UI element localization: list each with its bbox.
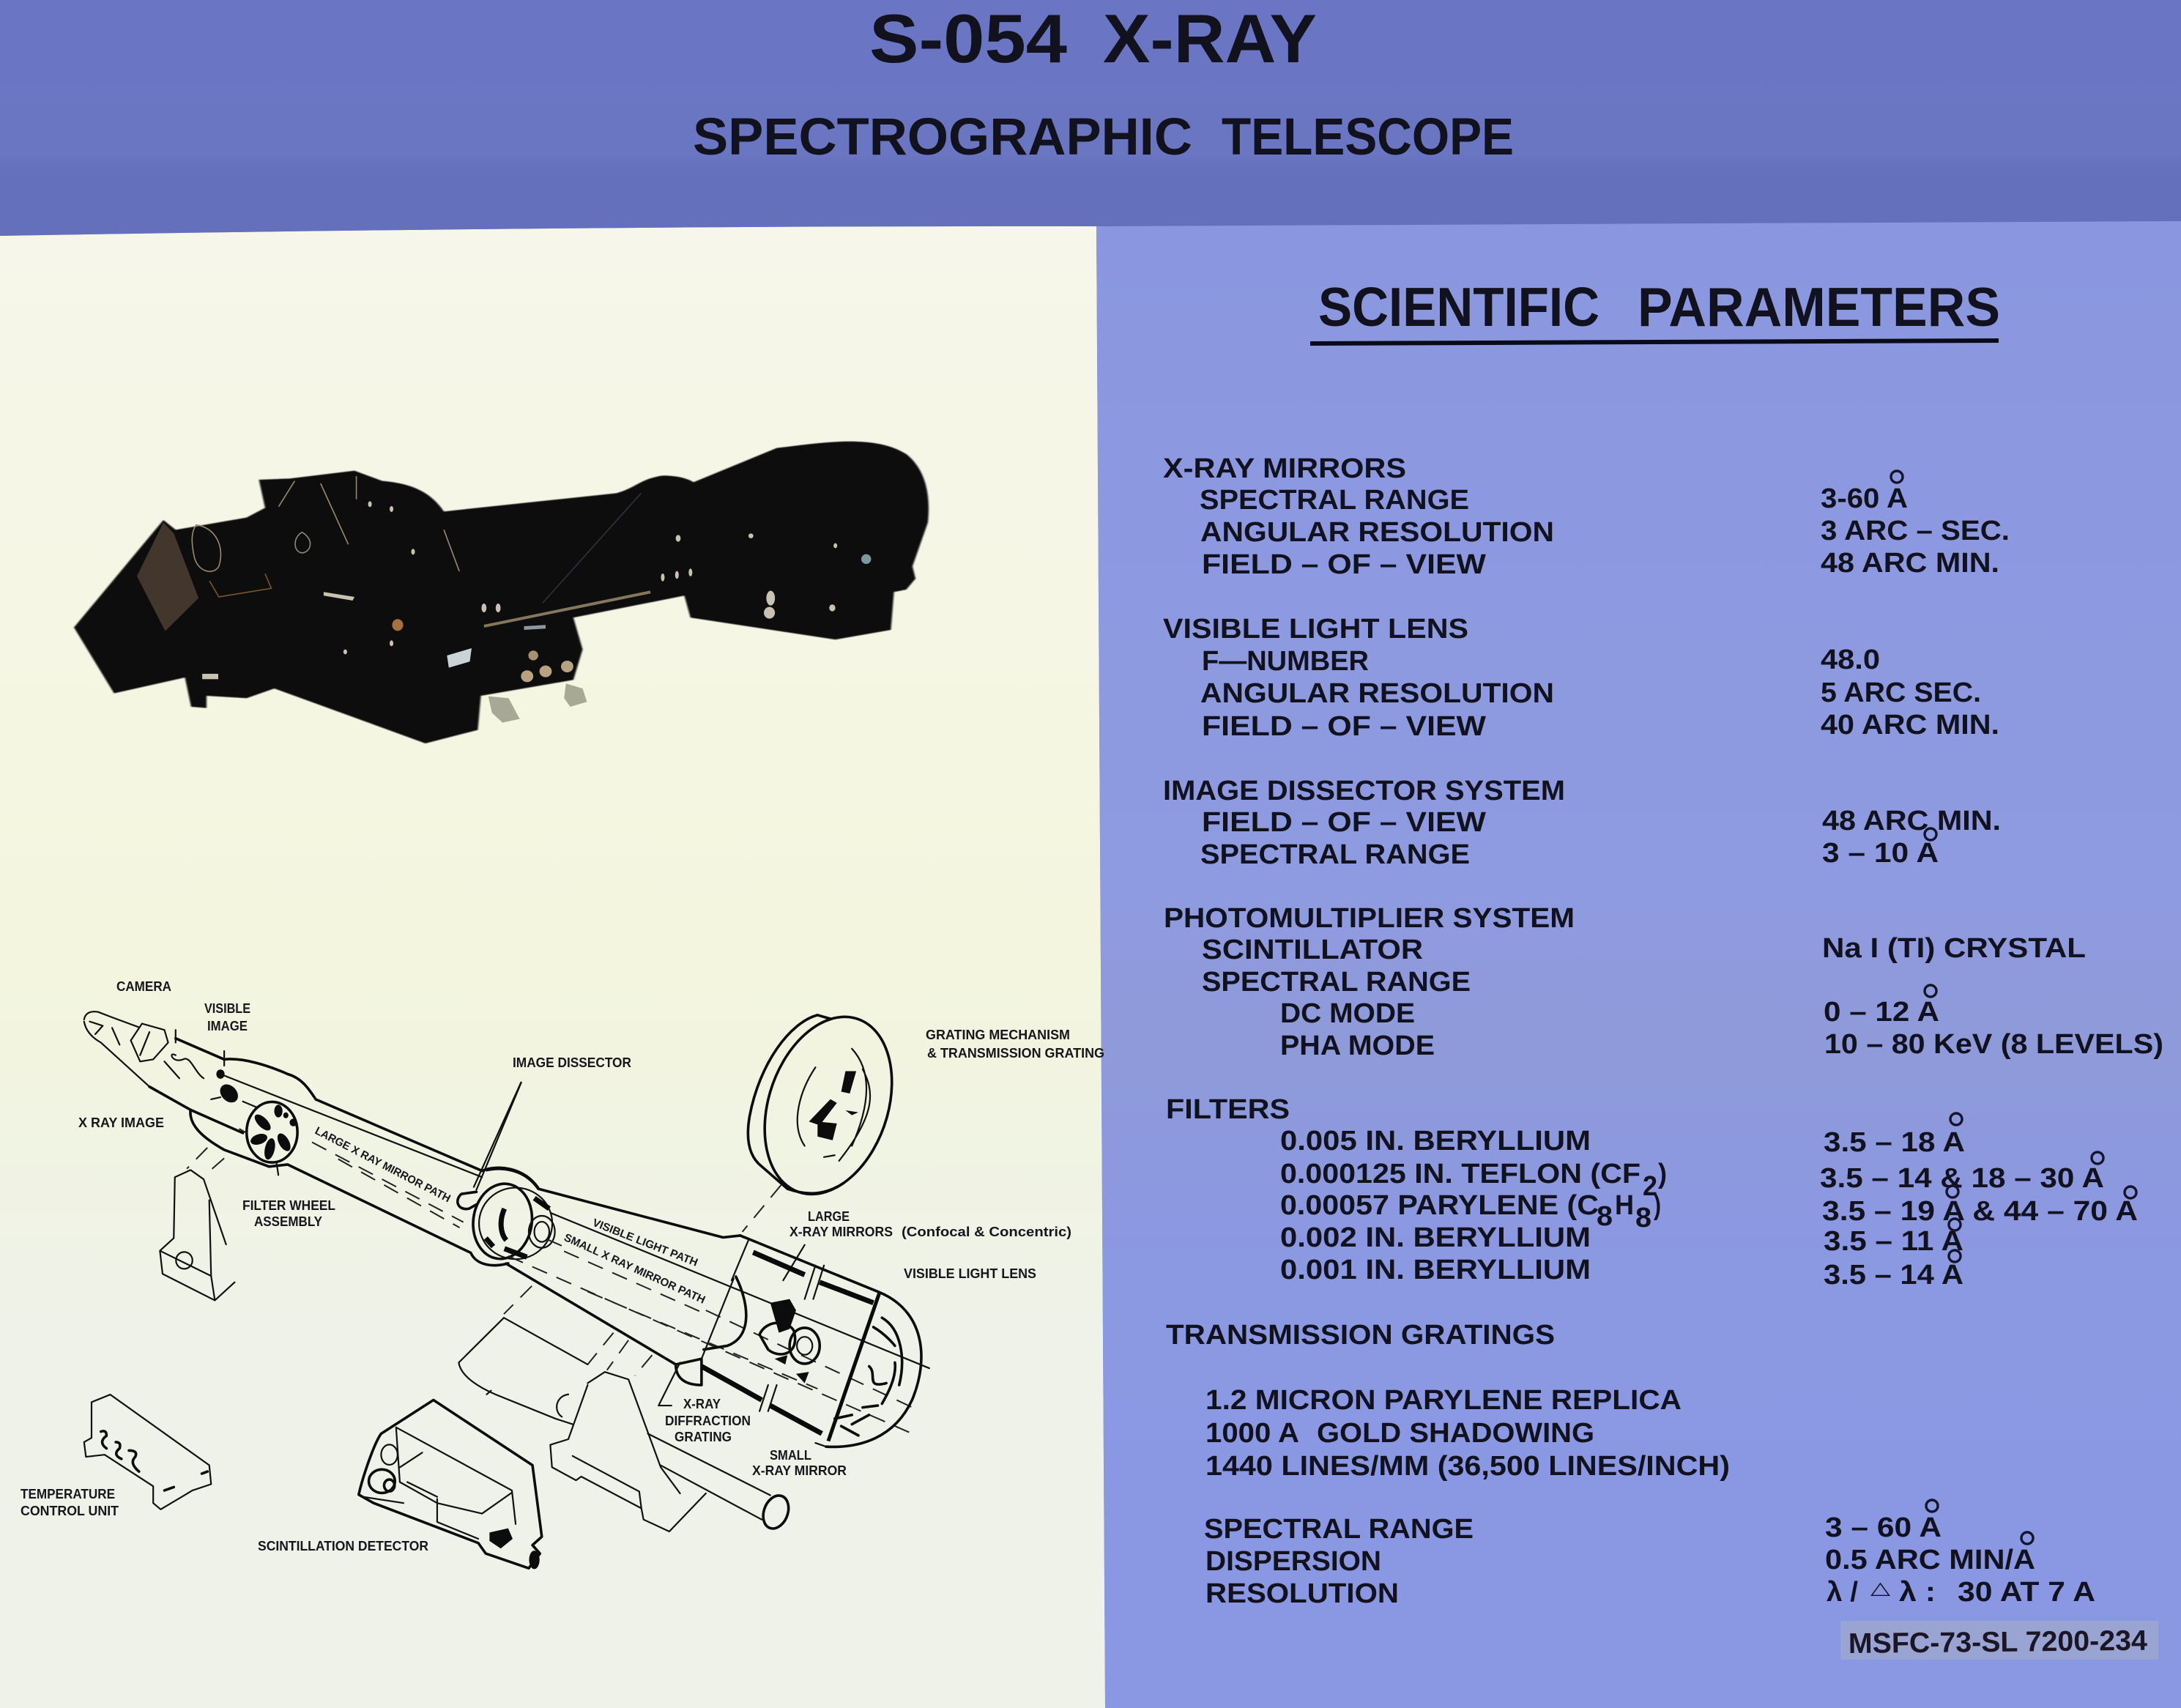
grating connector	[743, 1185, 781, 1232]
section: photomultiplier system	[1164, 903, 2163, 1061]
section: image dissector system: FIELD – OF – VIEW	[1202, 807, 1486, 838]
label: filter wheel assembly: ASSEMBLY	[254, 1214, 322, 1229]
diagram labels	[21, 979, 1104, 1553]
section: transmission gratings: λ :	[1899, 1577, 1936, 1608]
section: transmission gratings: 1440 LINES/MM (36,500 LINES/INCH)	[1205, 1451, 1730, 1482]
temperature control unit	[84, 1395, 211, 1510]
label: small x-ray mirror: SMALL	[770, 1448, 811, 1463]
photo silhouette	[74, 442, 929, 743]
section: visible light lens	[1163, 614, 1999, 742]
heading: scientific parameters: PARAMETERS	[1638, 276, 2000, 338]
section: transmission gratings: GOLD SHADOWING	[1317, 1418, 1594, 1449]
section: transmission gratings: 3 – 60 A	[1825, 1512, 1942, 1543]
diagram: right half of telescope line drawing	[458, 1005, 929, 1531]
label: visible light lens: VISIBLE LIGHT LENS	[904, 1266, 1036, 1281]
label: grating mechanism	[926, 1028, 1104, 1061]
section: filters: )	[1658, 1159, 1667, 1189]
dissector housing	[458, 1176, 555, 1266]
section: photomultiplier system: PHA MODE	[1280, 1031, 1435, 1061]
label: visible image	[204, 1001, 250, 1033]
title: S-054	[869, 0, 1067, 77]
section: photomultiplier system: SCINTILLATOR	[1202, 935, 1423, 965]
label: large x-ray mirrors: LARGE	[808, 1209, 850, 1224]
section: visible light lens: VISIBLE LIGHT LENS	[1163, 614, 1468, 645]
section: transmission gratings	[1166, 1320, 2095, 1609]
front telescope assembly	[676, 1236, 921, 1447]
section: filters: H	[1615, 1190, 1634, 1221]
section: visible light lens: F—NUMBER	[1202, 646, 1369, 677]
section: image dissector system	[1163, 776, 2001, 870]
section: transmission gratings: RESOLUTION	[1205, 1578, 1399, 1609]
section: image dissector system: 3 – 10 A	[1822, 838, 1939, 869]
mirror path lines	[239, 1129, 464, 1228]
support saddle	[458, 1286, 706, 1531]
diagram: left half of telescope line drawing	[84, 1011, 555, 1569]
section: transmission gratings: SPECTRAL RANGE	[1204, 1514, 1474, 1545]
label: small x-ray mirror: X-RAY MIRROR	[752, 1463, 847, 1478]
photo: telescope hardware	[74, 442, 929, 743]
section: visible light lens: 48.0	[1821, 645, 1880, 675]
label: small x ray mirror path: SMALL X RAY MIRROR PATH	[562, 1231, 707, 1307]
section: filters: 3.5 – 19 A & 44 – 70 A	[1822, 1196, 2138, 1227]
photo: mounting legs	[488, 683, 587, 723]
label: x-ray diffraction grating	[665, 1397, 751, 1444]
section: filters: 8	[1597, 1201, 1613, 1232]
parameters list	[1163, 453, 2163, 1609]
section: filters: 0.000125 IN. TEFLON (CF	[1280, 1159, 1641, 1189]
image dissector pointer	[477, 1083, 521, 1189]
section: photomultiplier system: PHOTOMULTIPLIER SYSTEM	[1164, 903, 1575, 934]
section: x-ray mirrors: FIELD – OF – VIEW	[1202, 549, 1486, 580]
label: grating mechanism: GRATING MECHANISM	[926, 1028, 1070, 1042]
label: filter wheel assembly	[242, 1198, 335, 1229]
label: small x-ray mirror	[752, 1448, 847, 1478]
large mirror pointer	[783, 1245, 805, 1280]
subtitle: TELESCOPE	[1222, 108, 1514, 166]
section: filters: 3.5 – 14 A	[1824, 1260, 1963, 1291]
label: large x-ray mirrors	[789, 1209, 1071, 1239]
section: filters: 3.5 – 18 A	[1824, 1127, 1965, 1158]
label: large x-ray mirrors: X-RAY MIRRORS	[789, 1225, 893, 1239]
section: visible light lens: FIELD – OF – VIEW	[1202, 711, 1486, 742]
section: x-ray mirrors: ANGULAR RESOLUTION	[1200, 517, 1554, 548]
diffraction grating pointer	[658, 1362, 680, 1406]
section: photomultiplier system: DC MODE	[1280, 998, 1415, 1029]
section: filters: )	[1654, 1190, 1661, 1221]
section: image dissector system: 48 ARC MIN.	[1822, 806, 2001, 836]
photo: highlights	[202, 501, 871, 682]
image dissector pointer lower	[474, 1083, 521, 1187]
scintillation detector	[359, 1400, 542, 1569]
title	[869, 0, 1317, 77]
label: x-ray diffraction grating: X-RAY	[683, 1397, 721, 1411]
panel: header band	[0, 0, 2181, 236]
section: filters: 0.001 IN. BERYLLIUM	[1280, 1255, 1591, 1285]
section: transmission gratings: λ /	[1827, 1577, 1858, 1608]
section: visible light lens: 5 ARC SEC.	[1821, 677, 1981, 708]
label: x ray image: X RAY IMAGE	[78, 1115, 164, 1130]
section: visible light lens: ANGULAR RESOLUTION	[1200, 678, 1554, 709]
section: photomultiplier system: SPECTRAL RANGE	[1202, 967, 1471, 998]
photo: tan instrument plate	[137, 522, 198, 631]
label: camera: CAMERA	[116, 979, 171, 994]
heading: scientific parameters: SCIENTIFIC	[1318, 276, 1599, 338]
section: transmission gratings: 30 AT 7 A	[1958, 1577, 2095, 1608]
section: image dissector system: IMAGE DISSECTOR SYSTEM	[1163, 776, 1565, 806]
section: filters: FILTERS	[1166, 1094, 1290, 1125]
section: filters: 8	[1635, 1203, 1651, 1233]
filter wheel	[247, 1102, 297, 1162]
label: visible image: VISIBLE	[204, 1001, 250, 1016]
panel: right parameters background	[1096, 221, 2181, 1708]
section: transmission gratings: TRANSMISSION GRATINGS	[1166, 1320, 1555, 1351]
section: photomultiplier system: 10 – 80 KeV (8 LEVELS)	[1824, 1029, 2163, 1060]
section: transmission gratings: 0.5 ARC MIN/A	[1825, 1545, 2035, 1575]
section: photomultiplier system: 0 – 12 A	[1824, 997, 1939, 1028]
main tube outline	[487, 1169, 929, 1433]
panel: left illustration background	[0, 226, 1105, 1708]
section: x-ray mirrors: 3 ARC – SEC.	[1821, 516, 2010, 546]
label: x-ray diffraction grating: GRATING	[675, 1430, 732, 1444]
dashed mount connectors	[187, 1148, 224, 1173]
label: large x-ray mirrors: (Confocal & Concentric)	[902, 1225, 1071, 1239]
section: filters	[1166, 1094, 2138, 1291]
heading underline	[1310, 338, 1999, 346]
filter wheel mount	[160, 1170, 234, 1300]
label: x-ray diffraction grating: DIFFRACTION	[665, 1414, 751, 1428]
section: filters: 3.5 – 11 A	[1824, 1226, 1963, 1257]
section: x-ray mirrors	[1163, 453, 2010, 580]
title: X-RAY	[1103, 0, 1317, 77]
section: filters: 2	[1643, 1171, 1657, 1202]
section: transmission gratings: DISPERSION	[1205, 1546, 1381, 1577]
heading: scientific parameters	[1318, 276, 2000, 338]
label: grating mechanism: & TRANSMISSION GRATING	[927, 1046, 1104, 1061]
camera end and tube outline	[84, 1011, 538, 1266]
grating mechanism disc	[745, 1005, 912, 1206]
label: large x ray mirror path: LARGE X RAY MIRROR PATH	[313, 1124, 453, 1205]
section: filters: 0.005 IN. BERYLLIUM	[1280, 1126, 1591, 1156]
section: transmission gratings: △	[1870, 1578, 1891, 1598]
label: image dissector: IMAGE DISSECTOR	[513, 1055, 631, 1070]
label: visible image: IMAGE	[207, 1019, 248, 1033]
section: filters: 3.5 – 14 & 18 – 30 A	[1820, 1163, 2104, 1194]
support tube	[648, 1433, 792, 1531]
section: filters: 0.00057 PARYLENE (C	[1280, 1190, 1599, 1221]
subtitle: SPECTROGRAPHIC	[693, 108, 1192, 166]
slide number label: MSFC-73-SL 7200-234	[1849, 1625, 2147, 1660]
mount bolt	[176, 1252, 193, 1269]
label: temperature control unit: TEMPERATURE	[21, 1487, 115, 1501]
photo: bright rod	[484, 592, 650, 626]
section: visible light lens: 40 ARC MIN.	[1821, 710, 1999, 740]
section: transmission gratings: 1.2 MICRON PARYLENE REPLICA	[1205, 1385, 1682, 1416]
label: temperature control unit	[21, 1487, 119, 1518]
section: transmission gratings: 1000 A	[1205, 1418, 1299, 1449]
section: image dissector system: SPECTRAL RANGE	[1200, 839, 1470, 870]
section: x-ray mirrors: 48 ARC MIN.	[1821, 548, 1999, 579]
section: photomultiplier system: Na I (TI) CRYSTAL	[1822, 933, 2086, 964]
label: temperature control unit: CONTROL UNIT	[21, 1504, 119, 1518]
photo: wiring lines	[192, 476, 641, 603]
label: visible light path: VISIBLE LIGHT PATH	[591, 1217, 699, 1269]
label: filter wheel assembly: FILTER WHEEL	[242, 1198, 335, 1213]
section: filters: 0.002 IN. BERYLLIUM	[1280, 1222, 1591, 1253]
label: scintillation detector: SCINTILLATION DETECTOR	[258, 1539, 428, 1553]
subtitle	[693, 108, 1514, 166]
section: x-ray mirrors: 3-60 A	[1821, 483, 1908, 514]
section: x-ray mirrors: SPECTRAL RANGE	[1200, 485, 1469, 516]
section: x-ray mirrors: X-RAY MIRRORS	[1163, 453, 1406, 484]
